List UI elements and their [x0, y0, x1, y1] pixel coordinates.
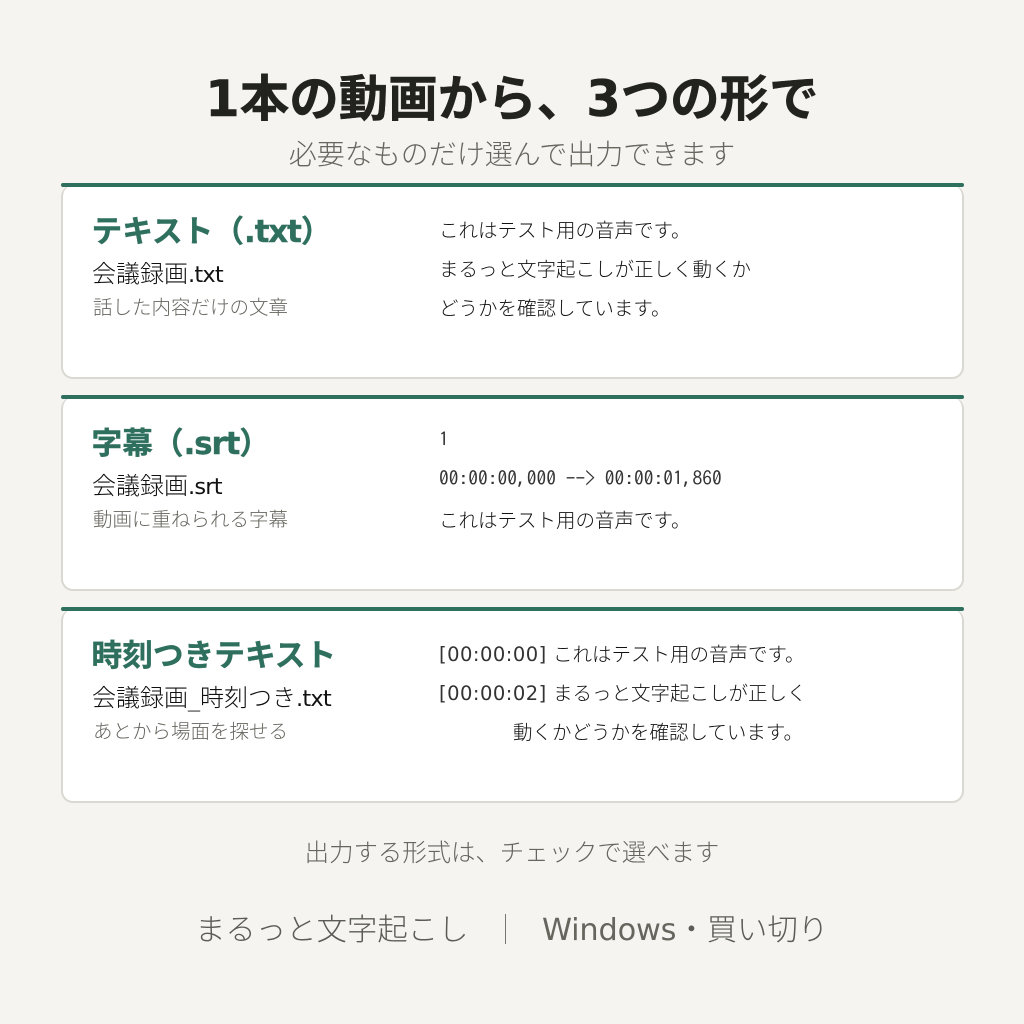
description: 動画に重ねられる字幕	[93, 508, 288, 531]
file name: 会議録画_時刻つき.txt	[92, 684, 331, 712]
sample text line 3: どうかを確認しています。	[439, 297, 670, 320]
file name: 会議録画.txt	[92, 260, 223, 288]
sample text: これはテスト用の音声です。	[439, 219, 691, 242]
timestamped line 3: 動くかどうかを確認しています。	[513, 721, 803, 744]
title: 1本の動画から、3つの形で	[205, 70, 819, 128]
subtitle: 必要なものだけ選んで出力できます	[289, 138, 735, 171]
panel: subtitle format	[61, 395, 964, 591]
timestamped line 2: [00:00:02] まるっと文字起こしが正しく	[439, 682, 806, 705]
product line: まるっと文字起こし	[195, 913, 469, 948]
sample text line 2: まるっと文字起こしが正しく動くか	[439, 258, 751, 281]
srt timecode: 00:00:00,000 --> 00:00:01,860	[439, 469, 722, 488]
panel: text format	[61, 183, 964, 379]
description: あとから場面を探せる	[93, 720, 288, 743]
file name: 会議録画.srt	[92, 472, 222, 500]
heading: timestamped text: 時刻つきテキスト	[92, 639, 336, 674]
description: 話した内容だけの文章	[93, 296, 288, 319]
heading: text: テキスト（.txt）	[92, 215, 332, 250]
timestamped line 1: [00:00:00] これはテスト用の音声です。	[439, 643, 805, 666]
panel: timestamped text format	[61, 607, 964, 803]
srt index: 1	[439, 430, 449, 449]
srt text: これはテスト用の音声です。	[439, 509, 691, 532]
footer note: 出力する形式は、チェックで選べます	[305, 838, 719, 867]
heading: subtitles: 字幕（.srt）	[92, 427, 270, 462]
separator	[505, 914, 506, 944]
license line: Windows・買い切り	[542, 913, 828, 948]
